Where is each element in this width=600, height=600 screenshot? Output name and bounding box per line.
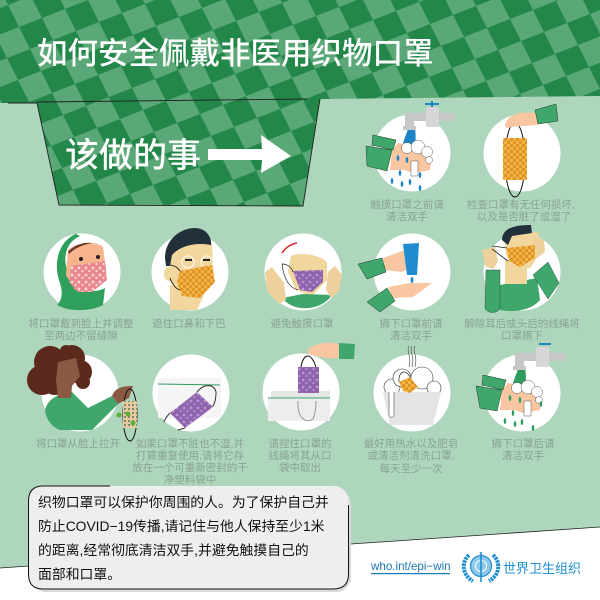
panel: store mask in bag xyxy=(132,354,248,486)
icon: glasses xyxy=(182,256,213,268)
caption: 将口罩戴到脸上并调整 xyxy=(28,317,134,330)
callout: key message xyxy=(28,486,351,592)
icon: bag xyxy=(268,399,330,421)
icon: left hand xyxy=(265,267,286,304)
icon: mask with loops xyxy=(123,389,137,441)
icon: hair xyxy=(502,225,532,245)
panel: put the mask on xyxy=(28,234,134,342)
caption: 清洁双手 xyxy=(386,210,428,223)
icon: sleeves xyxy=(366,135,396,171)
icon: right hand xyxy=(326,266,342,298)
icon: hair xyxy=(165,228,211,266)
arrow xyxy=(208,135,291,173)
icon: upper loop xyxy=(301,356,316,367)
caption: 放在一个可重新密封的干 xyxy=(132,461,248,474)
icon: hand xyxy=(505,112,540,128)
icon: water stream xyxy=(403,128,416,146)
caption: 袋中取出 xyxy=(279,461,321,474)
icon: bag fringe xyxy=(271,391,330,398)
icon: pink mask xyxy=(69,261,107,292)
tab outline xyxy=(8,99,320,206)
icon: purple mask xyxy=(293,270,323,292)
icon: lower hand xyxy=(388,283,432,298)
caption: 线绳将其从口 xyxy=(268,449,332,462)
icon: hijab xyxy=(57,234,105,310)
caption: 避免触摸口罩 xyxy=(270,317,334,330)
caption xyxy=(28,317,134,342)
panel: wash hands before touching mask xyxy=(366,101,455,223)
icon: faucet xyxy=(513,343,565,370)
panel: avoid touching the mask xyxy=(264,234,342,330)
icon: lower loop xyxy=(298,401,316,421)
icon: ear loop xyxy=(170,265,180,290)
icon: hand xyxy=(308,343,339,359)
panel: take mask out of bag xyxy=(262,343,355,474)
caption: 请捏住口罩的 xyxy=(268,437,332,450)
panel: clean hands before removing xyxy=(358,234,450,342)
caption: 解除耳后或头后的线绳将 xyxy=(464,317,580,330)
caption: 以及是否脏了或湿了 xyxy=(477,210,571,223)
icon: upper hand xyxy=(383,250,415,272)
icon: sanitiser tube xyxy=(403,243,419,275)
icon: purple mask xyxy=(298,367,319,393)
icon: drips xyxy=(504,395,542,431)
message text: 的距离,经常彻底清洁双手,并避免触摸自己的 xyxy=(38,542,309,558)
caption: 摘下口罩后请 xyxy=(492,437,555,450)
caption: 遮住口鼻和下巴 xyxy=(152,317,226,330)
caption xyxy=(467,198,575,223)
caption xyxy=(370,198,444,223)
icon: headband xyxy=(282,243,297,253)
icon: neck xyxy=(170,285,204,310)
message text xyxy=(38,494,329,582)
message text: 防止COVID−19传播,请记住与他人保持至少1米 xyxy=(38,518,325,534)
icon: ear loop xyxy=(282,264,298,290)
icon: thumb xyxy=(411,161,418,176)
icon: foam xyxy=(384,367,441,395)
caption xyxy=(380,317,443,342)
caption: 如果口罩不脏也不湿,并 xyxy=(136,437,244,450)
heading: do's: 该做的事 xyxy=(65,137,201,175)
message text: 面部和口罩。 xyxy=(38,566,121,582)
header band with checker pattern xyxy=(0,0,600,206)
icon: foam drip xyxy=(389,392,394,417)
icon: eyes xyxy=(185,259,210,261)
caption: 检查口罩有无任何损坏, xyxy=(467,198,575,211)
icon: neck xyxy=(505,260,527,284)
icon: seal line xyxy=(158,384,220,385)
icon: seal line xyxy=(268,397,330,399)
icon: orange mask xyxy=(399,377,418,393)
icon: steam xyxy=(408,346,416,367)
icon: foam xyxy=(402,140,432,164)
caption: 最好用热水以及肥皂 xyxy=(364,437,458,450)
icon: body xyxy=(45,392,118,430)
icon: face xyxy=(288,254,327,296)
icon: drips xyxy=(391,155,421,191)
caption: 净塑料袋中 xyxy=(164,473,216,486)
message text: 织物口罩可以保护你周围的人。为了保护自己并 xyxy=(38,494,329,510)
icon: foam xyxy=(512,380,542,404)
footer white band xyxy=(0,527,600,600)
link: who.int/epi-win: who.int/epi−win xyxy=(370,560,451,573)
icon: drop xyxy=(410,277,414,283)
icon: face xyxy=(504,232,541,268)
icon: loops xyxy=(164,386,216,430)
icon: arms xyxy=(485,262,559,312)
icon: face xyxy=(56,358,80,398)
icon: thumb xyxy=(524,401,531,416)
icon: shirt xyxy=(282,294,332,308)
icon: hands xyxy=(482,236,545,269)
icon: ear xyxy=(164,267,174,281)
caption xyxy=(268,437,332,474)
icon: orange mask xyxy=(177,265,215,298)
panel: pull mask away xyxy=(27,345,137,450)
icon: hands xyxy=(500,383,541,413)
caption: 每天至少一次 xyxy=(380,462,443,475)
icon: sleeves xyxy=(476,375,506,411)
icon: body xyxy=(500,278,540,311)
icon: purple mask xyxy=(170,392,213,428)
caption: 摘下口罩前请 xyxy=(380,317,443,330)
icon: strings xyxy=(492,246,508,261)
icon: mask with loops xyxy=(503,123,527,197)
icon: mask loop xyxy=(399,372,410,382)
icon: hand xyxy=(112,386,133,404)
caption: 打算重复使用,请将它存 xyxy=(136,449,244,462)
icon: sleeve xyxy=(339,343,355,359)
icon: face xyxy=(66,243,106,290)
icon: hair xyxy=(27,345,92,395)
title: 如何安全佩戴非医用织物口罩 xyxy=(37,37,434,71)
icon: face xyxy=(170,243,214,300)
panel: cover nose and chin xyxy=(152,228,228,330)
icon: water stream xyxy=(513,368,526,386)
caption: 口罩摘下 xyxy=(501,329,543,342)
logo text: 世界卫生组织 xyxy=(503,561,581,576)
panel: wash mask in hot water xyxy=(364,346,458,475)
icon: eyes xyxy=(79,255,100,261)
caption: 清洁双手 xyxy=(390,329,432,342)
caption: 清洁双手 xyxy=(502,449,544,462)
icon: hands xyxy=(390,143,431,173)
icon: germs xyxy=(116,412,136,426)
icon: faucet xyxy=(403,101,455,130)
caption: 触摸口罩之前请 xyxy=(370,198,444,211)
icon: hair xyxy=(68,243,92,254)
panel: wash hands after removing xyxy=(476,343,565,462)
icon: orange mask xyxy=(507,245,535,267)
icon: bucket xyxy=(383,392,441,425)
icon: sleeve xyxy=(535,104,558,124)
caption xyxy=(132,437,248,486)
icon: WHO emblem xyxy=(464,552,498,582)
caption: 至两边不留缝隙 xyxy=(44,329,118,342)
caption xyxy=(364,437,458,475)
caption xyxy=(464,317,580,342)
panel: untie the strings xyxy=(464,225,580,342)
caption xyxy=(492,437,555,462)
icon: sleeves xyxy=(358,258,395,312)
icon: plastic bag xyxy=(158,378,221,418)
caption: 或清洁剂清洗口罩, xyxy=(368,449,454,462)
panel: inspect the mask xyxy=(467,104,575,223)
caption: 将口罩从脸上拉开 xyxy=(36,437,120,450)
